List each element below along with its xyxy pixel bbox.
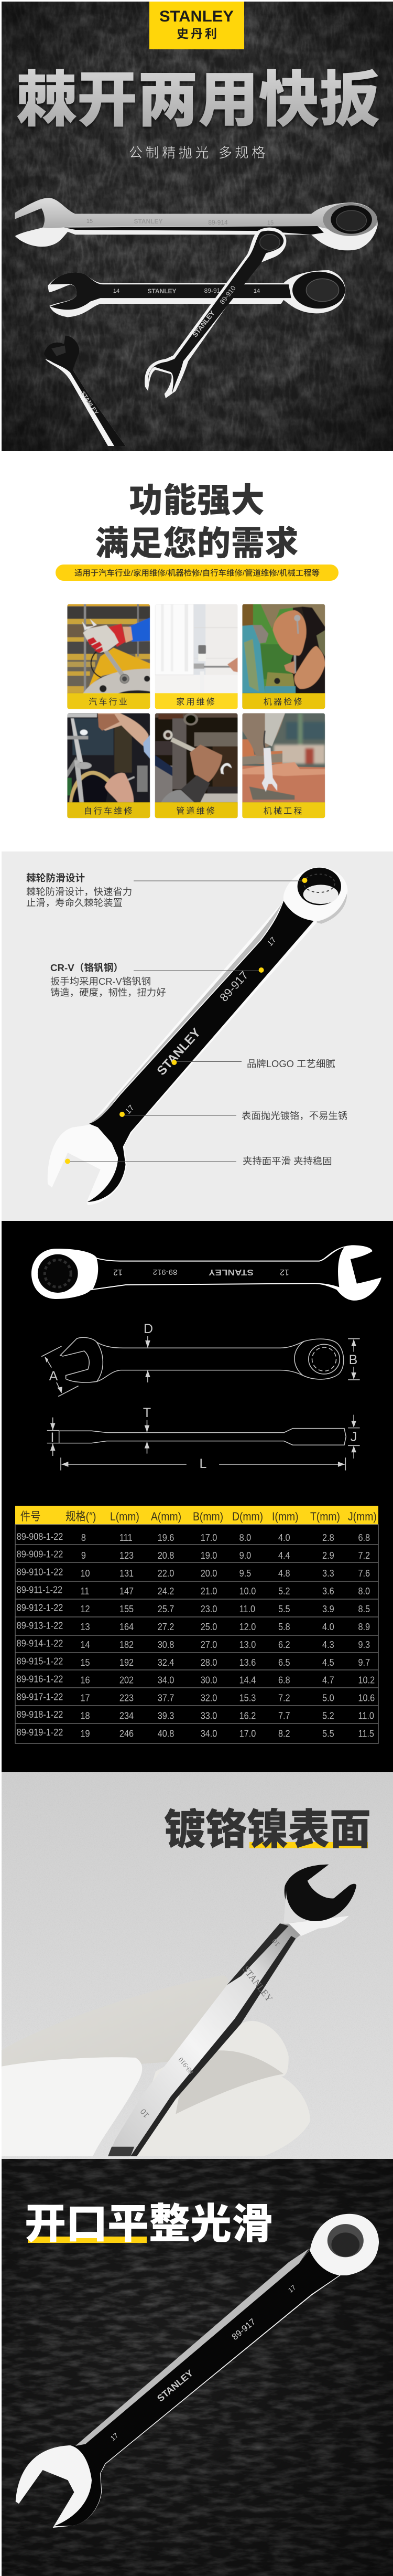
table rows: 89-909-1-22 [17, 1549, 63, 1560]
table rows: 155 [119, 1603, 134, 1614]
illustration: gloved hand holding wrench [2, 1865, 356, 2156]
table rows: 23.0 [201, 1603, 217, 1614]
table rows: 13.0 [239, 1639, 256, 1650]
wrench: middle: 14 [254, 288, 260, 294]
callout: CR-V: CR-V（铬钒钢） [50, 962, 123, 973]
table rows: 89-916-1-22 [17, 1673, 63, 1685]
table rows: 25.7 [158, 1603, 174, 1614]
logo: Stanley [149, 2, 244, 49]
table rows: 8 [81, 1532, 86, 1543]
table rows: 9 [81, 1550, 86, 1561]
table header: D(mm) [232, 1510, 263, 1523]
table rows: 15 [80, 1657, 90, 1668]
subtitle: 公制精抛光 多规格 [129, 145, 268, 161]
table rows: 89-910-1-22 [17, 1567, 63, 1578]
diagram: side view: T [143, 1406, 151, 1420]
table rows: 234 [119, 1710, 134, 1721]
wrench: top long: STANLEY [134, 218, 163, 225]
table rows: 25.0 [201, 1621, 217, 1632]
table rows: 27.0 [201, 1639, 217, 1650]
panel: anatomy [2, 851, 393, 1221]
table rows: 5.8 [278, 1621, 290, 1632]
table rows: 89-914-1-22 [17, 1637, 63, 1649]
table rows: 11 [80, 1585, 89, 1596]
table rows: 89-912-1-22 [17, 1602, 63, 1613]
diagram: top view: D [144, 1322, 153, 1336]
heading: features: 功能强大 [129, 482, 265, 519]
table header: 件号 [20, 1510, 40, 1523]
table rows: 34.0 [158, 1675, 174, 1686]
table rows [17, 1531, 375, 1739]
card: pipes: 管道维修 [176, 806, 216, 816]
table rows: 5.5 [322, 1728, 334, 1739]
table rows: 30.0 [201, 1675, 217, 1686]
table rows: 4.4 [278, 1550, 290, 1561]
card: bicycle: 自行车维修 [84, 806, 134, 816]
table rows: 12.0 [239, 1621, 256, 1632]
callout: jaw [65, 1155, 332, 1167]
wrench: smooth jaw: STANLEY [155, 2368, 195, 2404]
panel: hero [2, 2, 393, 451]
label: model: 89-917 [217, 968, 251, 1004]
table rows: 32.0 [201, 1693, 217, 1704]
wrench: specification photo: STANLEY [209, 1268, 254, 1276]
table rows: 8.0 [239, 1532, 251, 1543]
table rows: 111 [119, 1532, 133, 1543]
table rows: 22.0 [158, 1568, 174, 1579]
callout: ratchet: 棘轮防滑设计 [26, 872, 85, 883]
panel: smooth jaw [2, 2159, 393, 2576]
table rows: 14.4 [239, 1675, 256, 1686]
table rows: 2.8 [322, 1532, 334, 1543]
table rows: 131 [119, 1568, 134, 1579]
table rows: 20.8 [158, 1550, 174, 1561]
pill: applications: 适用于汽车行业/家用维修/机器检修/自行车维修/管道维修/机械工程等 [74, 568, 320, 578]
wrench: middle [48, 270, 345, 317]
table rows: 89-915-1-22 [17, 1655, 63, 1667]
wrench: bottom left: STANLEY [79, 390, 100, 416]
table rows: 19.0 [201, 1550, 217, 1561]
table rows: 18 [80, 1710, 90, 1721]
table rows: 17.0 [239, 1728, 256, 1739]
callout: CR-V: 扳手均采用CR-V铬钒钢 [50, 976, 151, 987]
panel: chrome surface [2, 1772, 393, 2159]
table rows: 89-917-1-22 [17, 1691, 63, 1702]
callout: surface: 表面抛光镀铬，不易生锈 [242, 1110, 347, 1121]
table rows: 37.7 [158, 1693, 174, 1704]
table header [20, 1510, 377, 1523]
table rows: 9.5 [239, 1568, 251, 1579]
table rows: 5.2 [322, 1710, 334, 1721]
wrench: smooth jaw: 17 [287, 2283, 297, 2294]
table rows: 4.3 [322, 1639, 334, 1650]
wrench: top long: 15 [86, 218, 93, 225]
table rows: 89-918-1-22 [17, 1709, 63, 1720]
table rows: 14 [80, 1639, 90, 1650]
table rows: 33.0 [201, 1710, 217, 1721]
table rows: 164 [119, 1621, 134, 1632]
table rows: 5.5 [278, 1603, 290, 1614]
callout: ratchet: 棘轮防滑设计，快速省力 [26, 886, 132, 897]
callout: logo [171, 1058, 335, 1069]
card: pipes [155, 713, 238, 818]
illustration: gloved hand holding wrench: STANLEY [241, 1964, 275, 2004]
card: machinery: 机器检修 [264, 697, 304, 707]
diagram: top view: B [349, 1353, 357, 1367]
table rows: 7.7 [278, 1710, 290, 1721]
callout: jaw: 夹持面平滑 夹持稳固 [243, 1155, 332, 1167]
table rows: 4.7 [322, 1675, 334, 1686]
card: engineering: 机械工程 [264, 806, 304, 816]
callout: ratchet: 止滑，寿命久棘轮装置 [26, 897, 123, 908]
table rows: 19 [80, 1728, 90, 1739]
table rows: 13 [80, 1621, 90, 1632]
table header: A(mm) [151, 1510, 181, 1523]
wrench: specification photo: 12 [280, 1268, 289, 1276]
illustration: gloved hand holding wrench: 10 [270, 1937, 281, 1948]
table rows: 24.2 [158, 1585, 174, 1596]
callout: surface [119, 1110, 347, 1121]
table rows: 202 [119, 1675, 134, 1686]
table rows: 10.6 [358, 1693, 375, 1704]
title: 棘开两用快扳 [16, 67, 380, 134]
table rows: 21.0 [201, 1585, 217, 1596]
wrench: anatomy [48, 867, 347, 1205]
wrench: specification photo [31, 1245, 381, 1301]
wrench: top long [15, 198, 378, 250]
table rows: 6.8 [278, 1675, 290, 1686]
table rows: 89-911-1-22 [17, 1584, 62, 1595]
table rows: 19.6 [158, 1532, 174, 1543]
wrench: diagonal: STANLEY [191, 309, 216, 338]
callout: CR-V: 铸造，硬度，韧性，扭力好 [50, 987, 166, 998]
wrench: specification photo: 12 [113, 1268, 123, 1276]
logo: Stanley: 史丹利 [177, 27, 219, 40]
label: size 17 lower: 17 [124, 1103, 136, 1116]
table rows: 246 [119, 1728, 134, 1739]
wrench: specification photo: 89-912 [153, 1268, 177, 1276]
table rows: 5.0 [322, 1693, 334, 1704]
table rows: 39.3 [158, 1710, 174, 1721]
label: brand: STANLEY [155, 1026, 203, 1078]
card: home [155, 604, 238, 709]
illustration: gloved hand holding wrench: 89-910 [177, 2056, 195, 2076]
table rows: 4.5 [322, 1657, 334, 1668]
table header: 规格(″) [66, 1510, 96, 1523]
wrench: smooth jaw [16, 2214, 379, 2528]
wrench: middle: 14 [113, 288, 119, 294]
wrench: diagonal [145, 228, 286, 398]
label: size 17: 17 [266, 935, 278, 948]
table rows: 10.2 [358, 1675, 375, 1686]
diagram: side view: J [351, 1430, 357, 1444]
table rows: 3.3 [322, 1568, 334, 1579]
wrench: top long: 15 [267, 220, 274, 226]
table rows: 3.9 [322, 1603, 334, 1614]
table rows: 13.6 [239, 1657, 256, 1668]
table rows: 20.0 [201, 1568, 217, 1579]
table rows: 8.9 [358, 1621, 370, 1632]
callout: logo: 品牌LOGO 工艺细腻 [247, 1058, 335, 1069]
table rows: 10.0 [239, 1585, 256, 1596]
table rows: 4.0 [322, 1621, 334, 1632]
table rows: 5.2 [278, 1585, 290, 1596]
underline highlight [249, 1842, 368, 1848]
title: 镀铬镍表面 [164, 1806, 371, 1853]
table rows: 28.0 [201, 1657, 217, 1668]
table rows: 8.2 [278, 1728, 290, 1739]
table rows: 9.0 [239, 1550, 251, 1561]
card: auto: 汽车行业 [89, 697, 129, 707]
table rows: 89-919-1-22 [17, 1727, 63, 1738]
wrench: smooth jaw: 89-917 [230, 2316, 257, 2342]
table rows: 6.5 [278, 1657, 290, 1668]
heading: features: 满足您的需求 [95, 525, 299, 562]
diagram: side view: L [200, 1456, 207, 1471]
table header: L(mm) [110, 1510, 139, 1523]
table rows: 32.4 [158, 1657, 174, 1668]
table rows: 8.5 [358, 1603, 370, 1614]
wrench: middle: STANLEY [147, 288, 177, 295]
table rows: 9.3 [358, 1639, 370, 1650]
table rows: 7.2 [358, 1550, 370, 1561]
wrench: middle: 89-91 [204, 287, 221, 294]
card: bicycle [67, 713, 150, 818]
table rows: 27.2 [158, 1621, 174, 1632]
table header: J(mm) [348, 1510, 377, 1523]
wrench: diagonal: 89-910 [218, 284, 237, 306]
diagram: top view [41, 1322, 360, 1397]
table rows: 182 [119, 1639, 134, 1650]
table rows: 40.8 [158, 1728, 174, 1739]
table header: T(mm) [310, 1510, 340, 1523]
title: 开口平整光滑 [25, 2200, 273, 2247]
diagram: top view: A [49, 1369, 58, 1383]
pill: applications [56, 565, 339, 581]
table rows: 89-908-1-22 [17, 1531, 63, 1542]
table rows: 192 [119, 1657, 134, 1668]
table rows: 12 [80, 1603, 90, 1614]
heading: features [95, 482, 299, 562]
table rows: 11.0 [239, 1603, 255, 1614]
table: size chart [15, 1506, 378, 1743]
table rows: 147 [119, 1585, 134, 1596]
table rows: 17 [80, 1693, 90, 1704]
diagram: side view [47, 1406, 360, 1471]
callout: ratchet [26, 872, 307, 908]
table rows: 4.8 [278, 1568, 290, 1579]
wrench: top long: 89-914 [208, 219, 228, 226]
table rows: 11.0 [358, 1710, 374, 1721]
card: auto [67, 604, 150, 709]
panel: specification [2, 1221, 393, 1772]
table rows: 89-913-1-22 [17, 1620, 63, 1631]
table rows: 7.6 [358, 1568, 370, 1579]
table rows: 8.0 [358, 1585, 370, 1596]
table rows: 123 [119, 1550, 134, 1561]
table rows: 11.5 [358, 1728, 374, 1739]
table rows: 16 [80, 1675, 90, 1686]
table rows: 17.0 [201, 1532, 217, 1543]
table rows: 6.2 [278, 1639, 290, 1650]
underline highlight [28, 2237, 147, 2243]
diagram: side view: I [51, 1430, 54, 1445]
callout: CR-V [50, 962, 264, 998]
wrench: bottom left [44, 336, 126, 446]
card: engineering [242, 713, 325, 818]
card: machinery [242, 604, 325, 709]
table header: I(mm) [272, 1510, 299, 1523]
wrench: smooth jaw: 17 [109, 2431, 119, 2442]
table rows: 7.2 [278, 1693, 290, 1704]
table header: B(mm) [193, 1510, 223, 1523]
table rows: 3.6 [322, 1585, 334, 1596]
table rows: 16.2 [239, 1710, 256, 1721]
table rows: 6.8 [358, 1532, 370, 1543]
table rows: 30.8 [158, 1639, 174, 1650]
table rows: 10 [80, 1568, 90, 1579]
logo: Stanley: STANLEY [159, 8, 234, 25]
table rows: 223 [119, 1693, 134, 1704]
illustration: gloved hand holding wrench: 10 [139, 2107, 151, 2120]
table rows: 15.3 [239, 1693, 256, 1704]
table rows: 34.0 [201, 1728, 217, 1739]
table rows: 4.0 [278, 1532, 290, 1543]
table rows: 9.7 [358, 1657, 370, 1668]
table rows: 2.9 [322, 1550, 334, 1561]
card: home: 家用维修 [176, 697, 216, 707]
